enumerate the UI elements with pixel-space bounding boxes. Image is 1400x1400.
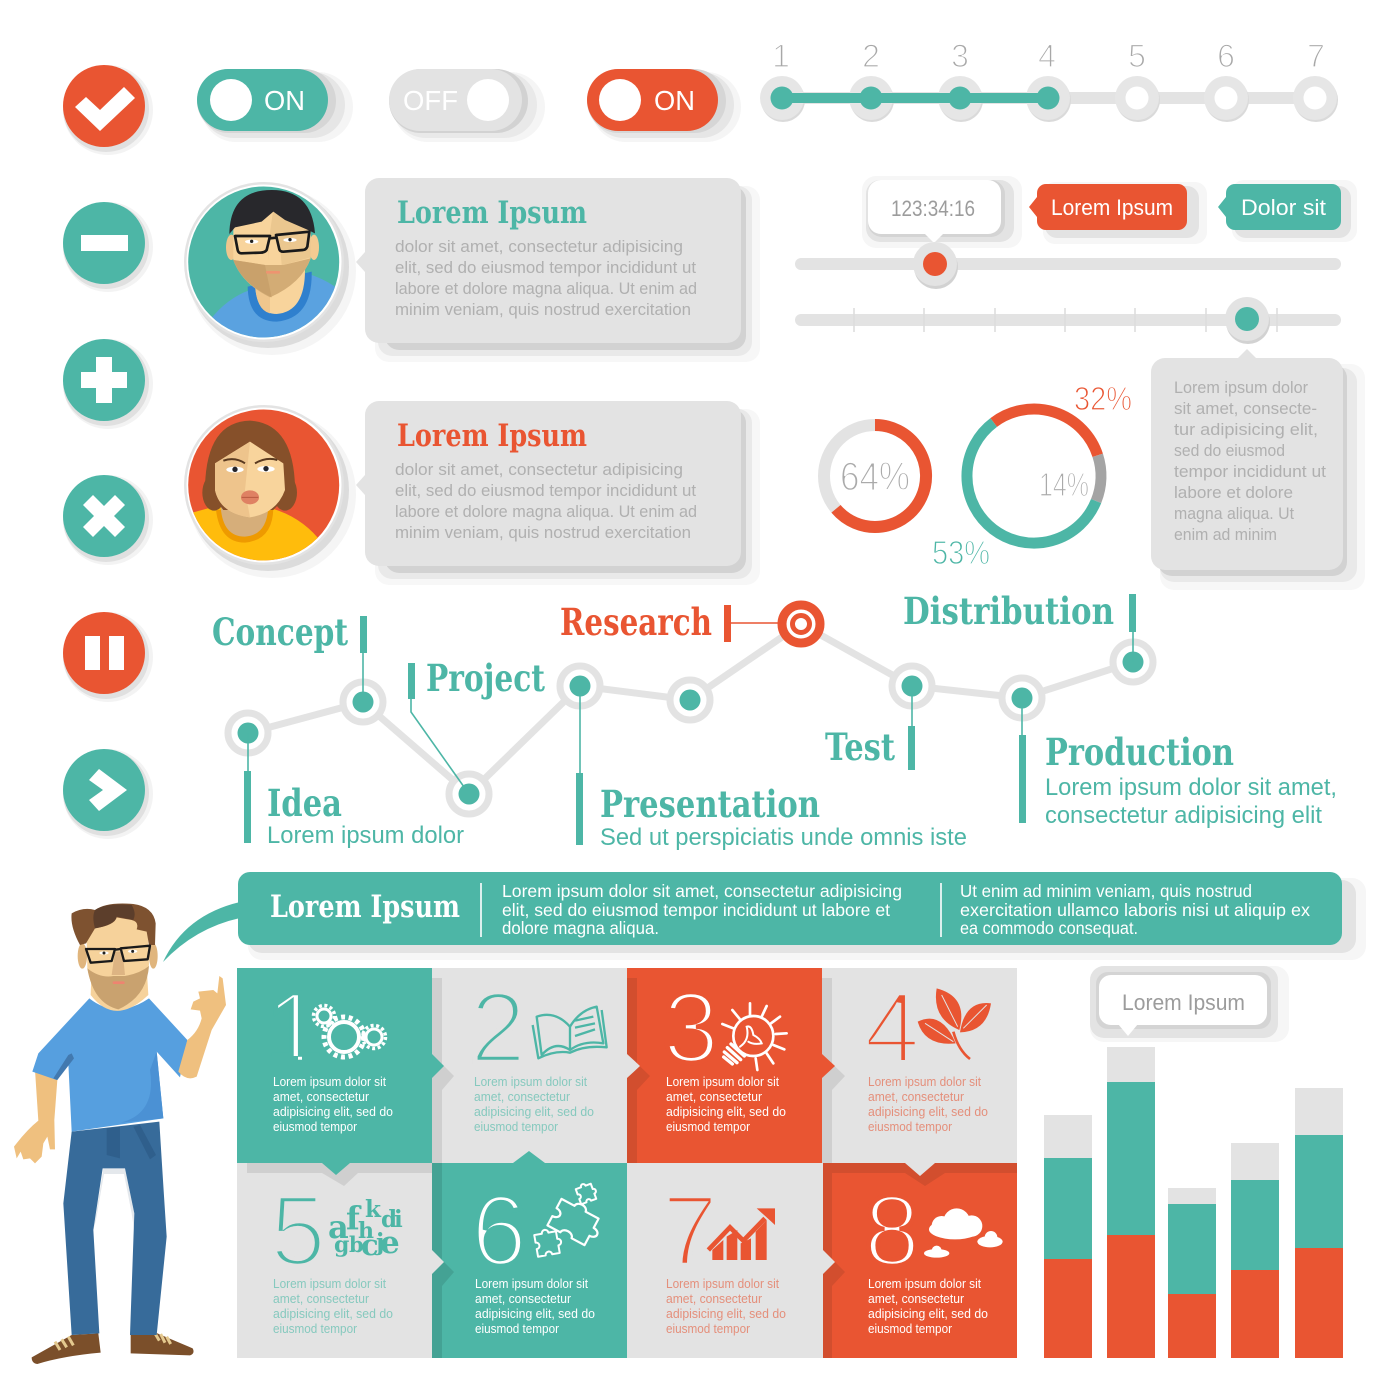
card 8: clouds: 8 xyxy=(864,1175,920,1287)
panel: profile bubble two: Lorem Ipsum xyxy=(397,418,587,454)
banner: speech heading: dolore magna aliqua. xyxy=(502,918,659,938)
panel: profile bubble one: labore et dolore magna aliqua. Ut enim ad xyxy=(395,279,697,298)
card 7: growth chart: Lorem ipsum dolor sit xyxy=(666,1276,779,1291)
progress stepper: 4 xyxy=(1038,38,1056,74)
card 6: puzzle: amet, consectetur xyxy=(475,1291,572,1306)
panel: profile bubble two: minim veniam, quis nostrud exercitation xyxy=(395,523,691,542)
card 4: leaves: eiusmod tempor xyxy=(868,1119,953,1134)
panel: slider note: magna aliqua. Ut xyxy=(1174,504,1294,523)
card 8: clouds: adipisicing elit, sed do xyxy=(868,1306,988,1321)
banner: speech heading: elit, sed do eiusmod tempor incididunt ut labore et xyxy=(502,900,890,920)
icon: plus button xyxy=(63,339,153,429)
card 6: puzzle: 6 xyxy=(471,1175,527,1287)
panel: slider note: tempor incididunt ut xyxy=(1174,462,1326,481)
toggle: orange on: ON xyxy=(654,85,695,116)
progress stepper xyxy=(760,38,1338,122)
card 4: leaves: 4 xyxy=(864,972,920,1084)
progress stepper: 7 xyxy=(1307,38,1325,74)
card 1: gears: adipisicing elit, sed do xyxy=(273,1104,393,1119)
label: Production: consectetur adipisicing elit xyxy=(1045,802,1322,829)
chart: donut three segments xyxy=(932,380,1132,571)
label: Production: Lorem ipsum dolor sit amet, xyxy=(1045,774,1337,801)
chart: donut three segments: 32% xyxy=(1074,380,1132,417)
toggle: teal on: ON xyxy=(264,85,305,116)
tag: orange label: Lorem Ipsum xyxy=(1051,195,1173,220)
slider: teal handle with ticks xyxy=(795,297,1341,344)
label: Test xyxy=(825,686,915,770)
card 5: letters: j xyxy=(374,1229,384,1256)
panel: slider note xyxy=(1151,349,1365,590)
card 5: letters: e xyxy=(380,1225,400,1261)
label: Test: Test xyxy=(825,725,895,769)
card 2: book: Lorem ipsum dolor sit xyxy=(474,1074,587,1089)
card 5: letters: c xyxy=(361,1228,379,1262)
panel: slider note: Lorem ipsum dolor xyxy=(1174,378,1308,397)
panel: profile bubble two xyxy=(356,401,760,585)
label: Idea: Lorem ipsum dolor xyxy=(267,822,464,849)
card 2: book xyxy=(470,972,607,1134)
card 3: light bulb: Lorem ipsum dolor sit xyxy=(666,1074,779,1089)
card 3: light bulb: adipisicing elit, sed do xyxy=(666,1104,786,1119)
card 2: book: 2 xyxy=(470,972,526,1084)
panel: profile bubble one: minim veniam, quis nostrud exercitation xyxy=(395,300,691,319)
card 8: clouds xyxy=(864,1175,1003,1336)
label: Presentation: Sed ut perspiciatis unde omnis iste xyxy=(600,824,967,851)
label: Distribution xyxy=(903,589,1136,662)
card 8: clouds: Lorem ipsum dolor sit xyxy=(868,1276,981,1291)
panel: slider note: enim ad minim xyxy=(1174,525,1277,544)
progress stepper: 6 xyxy=(1217,38,1235,74)
chart: stacked bars xyxy=(1044,1047,1343,1358)
card 5: letters: a xyxy=(328,1208,349,1246)
label: Production: Production xyxy=(1045,730,1234,774)
toggle: off xyxy=(389,69,545,142)
card 2: book: adipisicing elit, sed do xyxy=(474,1104,594,1119)
card 5: letters: b xyxy=(349,1232,364,1257)
panel: slider note: labore et dolore xyxy=(1174,483,1293,502)
chart: donut 64 percent xyxy=(824,425,926,527)
panel: profile bubble one xyxy=(356,178,760,362)
card 6: puzzle xyxy=(471,1175,606,1336)
banner: speech heading: exercitation ullamco laboris nisi ut aliquip ex xyxy=(960,900,1310,920)
card 4: leaves xyxy=(864,972,991,1134)
label: Presentation xyxy=(576,686,967,851)
toggle: orange on xyxy=(587,69,741,142)
card 1: gears: 1 xyxy=(266,972,322,1084)
avatar: man xyxy=(183,182,356,355)
icon: minus button xyxy=(63,202,153,292)
grid backgrounds xyxy=(237,968,1017,1358)
progress stepper: 1 xyxy=(772,38,790,74)
card 8: clouds: eiusmod tempor xyxy=(868,1321,953,1336)
card 1: gears: amet, consectetur xyxy=(273,1089,370,1104)
label: Research: Research xyxy=(560,600,712,644)
banner: speech heading: Lorem Ipsum xyxy=(270,889,460,925)
chart: donut three segments: 14% xyxy=(1039,466,1089,503)
panel: slider note: tur adipisicing elit, xyxy=(1174,420,1318,439)
card 3: light bulb xyxy=(663,972,787,1134)
panel: slider note: sit amet, consecte- xyxy=(1174,399,1317,418)
progress stepper: 2 xyxy=(862,38,880,74)
card 5: letters: h xyxy=(358,1218,374,1244)
label: Concept xyxy=(212,610,367,702)
tag: teal label xyxy=(1218,180,1357,242)
card 6: puzzle: adipisicing elit, sed do xyxy=(475,1306,595,1321)
card 7: growth chart: amet, consectetur xyxy=(666,1291,763,1306)
panel: profile bubble one: Lorem Ipsum xyxy=(397,195,587,231)
card 5: letters: Lorem ipsum dolor sit xyxy=(273,1276,386,1291)
card 5: letters: eiusmod tempor xyxy=(273,1321,358,1336)
panel: slider note: sed do eiusmod xyxy=(1174,441,1285,460)
label: Concept: Concept xyxy=(212,610,348,654)
character: bearded man xyxy=(14,903,226,1364)
progress stepper: 3 xyxy=(951,38,969,74)
panel: profile bubble two: labore et dolore magna aliqua. Ut enim ad xyxy=(395,502,697,521)
banner: speech heading: ea commodo consequat. xyxy=(960,918,1138,938)
card 5: letters: amet, consectetur xyxy=(273,1291,370,1306)
banner: speech heading: Lorem ipsum dolor sit amet, consectetur adipisicing xyxy=(502,881,902,901)
tooltip: time value: 123:34:16 xyxy=(891,196,975,221)
card 3: light bulb: 3 xyxy=(663,972,719,1084)
card 4: leaves: amet, consectetur xyxy=(868,1089,965,1104)
icon: pause button xyxy=(63,612,153,702)
panel: profile bubble two: dolor sit amet, consectetur adipisicing xyxy=(395,460,683,479)
label: Project: Project xyxy=(426,656,545,700)
card 7: growth chart xyxy=(662,1175,786,1336)
card 8: clouds: amet, consectetur xyxy=(868,1291,965,1306)
card 5: letters: f xyxy=(346,1199,362,1237)
card 4: leaves: Lorem ipsum dolor sit xyxy=(868,1074,981,1089)
tooltip: bar chart title: Lorem Ipsum xyxy=(1122,990,1245,1015)
label: Presentation: Presentation xyxy=(600,782,820,826)
icon: next button xyxy=(63,749,153,839)
card 4: leaves: adipisicing elit, sed do xyxy=(868,1104,988,1119)
card 6: puzzle: eiusmod tempor xyxy=(475,1321,560,1336)
card 2: book: eiusmod tempor xyxy=(474,1119,559,1134)
card 5: letters: adipisicing elit, sed do xyxy=(273,1306,393,1321)
tag: orange label xyxy=(1029,182,1207,244)
card 5: letters xyxy=(270,1175,403,1336)
panel: profile bubble two: elit, sed do eiusmod tempor incididunt ut xyxy=(395,481,696,500)
icon: close button xyxy=(63,475,153,565)
toggle: teal on xyxy=(197,69,353,142)
card 1: gears: Lorem ipsum dolor sit xyxy=(273,1074,386,1089)
progress stepper: 5 xyxy=(1128,38,1146,74)
card 5: letters: i xyxy=(394,1206,403,1233)
label: Idea xyxy=(244,733,464,849)
icon: check button xyxy=(63,65,153,155)
card 2: book: amet, consectetur xyxy=(474,1089,571,1104)
avatar: woman xyxy=(183,403,356,578)
tag: teal label: Dolor sit xyxy=(1241,195,1326,220)
card 6: puzzle: Lorem ipsum dolor sit xyxy=(475,1276,588,1291)
card 7: growth chart: adipisicing elit, sed do xyxy=(666,1306,786,1321)
card 5: letters: k xyxy=(365,1196,382,1223)
label: Distribution: Distribution xyxy=(903,589,1114,633)
timeline: connected milestones xyxy=(228,605,1153,814)
card 7: growth chart: 7 xyxy=(662,1175,718,1287)
slider: orange handle xyxy=(795,242,1341,289)
card 3: light bulb: eiusmod tempor xyxy=(666,1119,751,1134)
card 5: letters: g xyxy=(334,1232,349,1258)
card 1: gears xyxy=(266,972,393,1134)
card 7: growth chart: eiusmod tempor xyxy=(666,1321,751,1336)
card 3: light bulb: amet, consectetur xyxy=(666,1089,763,1104)
label: Idea: Idea xyxy=(267,781,342,825)
banner: speech heading: Ut enim ad minim veniam, quis nostrud xyxy=(960,881,1252,901)
tooltip: bar chart title xyxy=(1090,966,1289,1042)
banner: speech heading xyxy=(163,872,1366,962)
label: Project xyxy=(408,656,545,794)
label: Production xyxy=(1019,698,1337,829)
chart: donut three segments: 53% xyxy=(932,534,990,571)
card 5: letters: d xyxy=(381,1206,397,1233)
tooltip: time value xyxy=(862,176,1022,248)
panel: profile bubble one: elit, sed do eiusmod tempor incididunt ut xyxy=(395,258,696,277)
toggle: off: OFF xyxy=(403,85,458,116)
card 5: letters: 5 xyxy=(270,1175,326,1287)
card 1: gears: eiusmod tempor xyxy=(273,1119,358,1134)
chart: donut 64 percent: 64% xyxy=(840,455,910,499)
panel: profile bubble one: dolor sit amet, consectetur adipisicing xyxy=(395,237,683,256)
